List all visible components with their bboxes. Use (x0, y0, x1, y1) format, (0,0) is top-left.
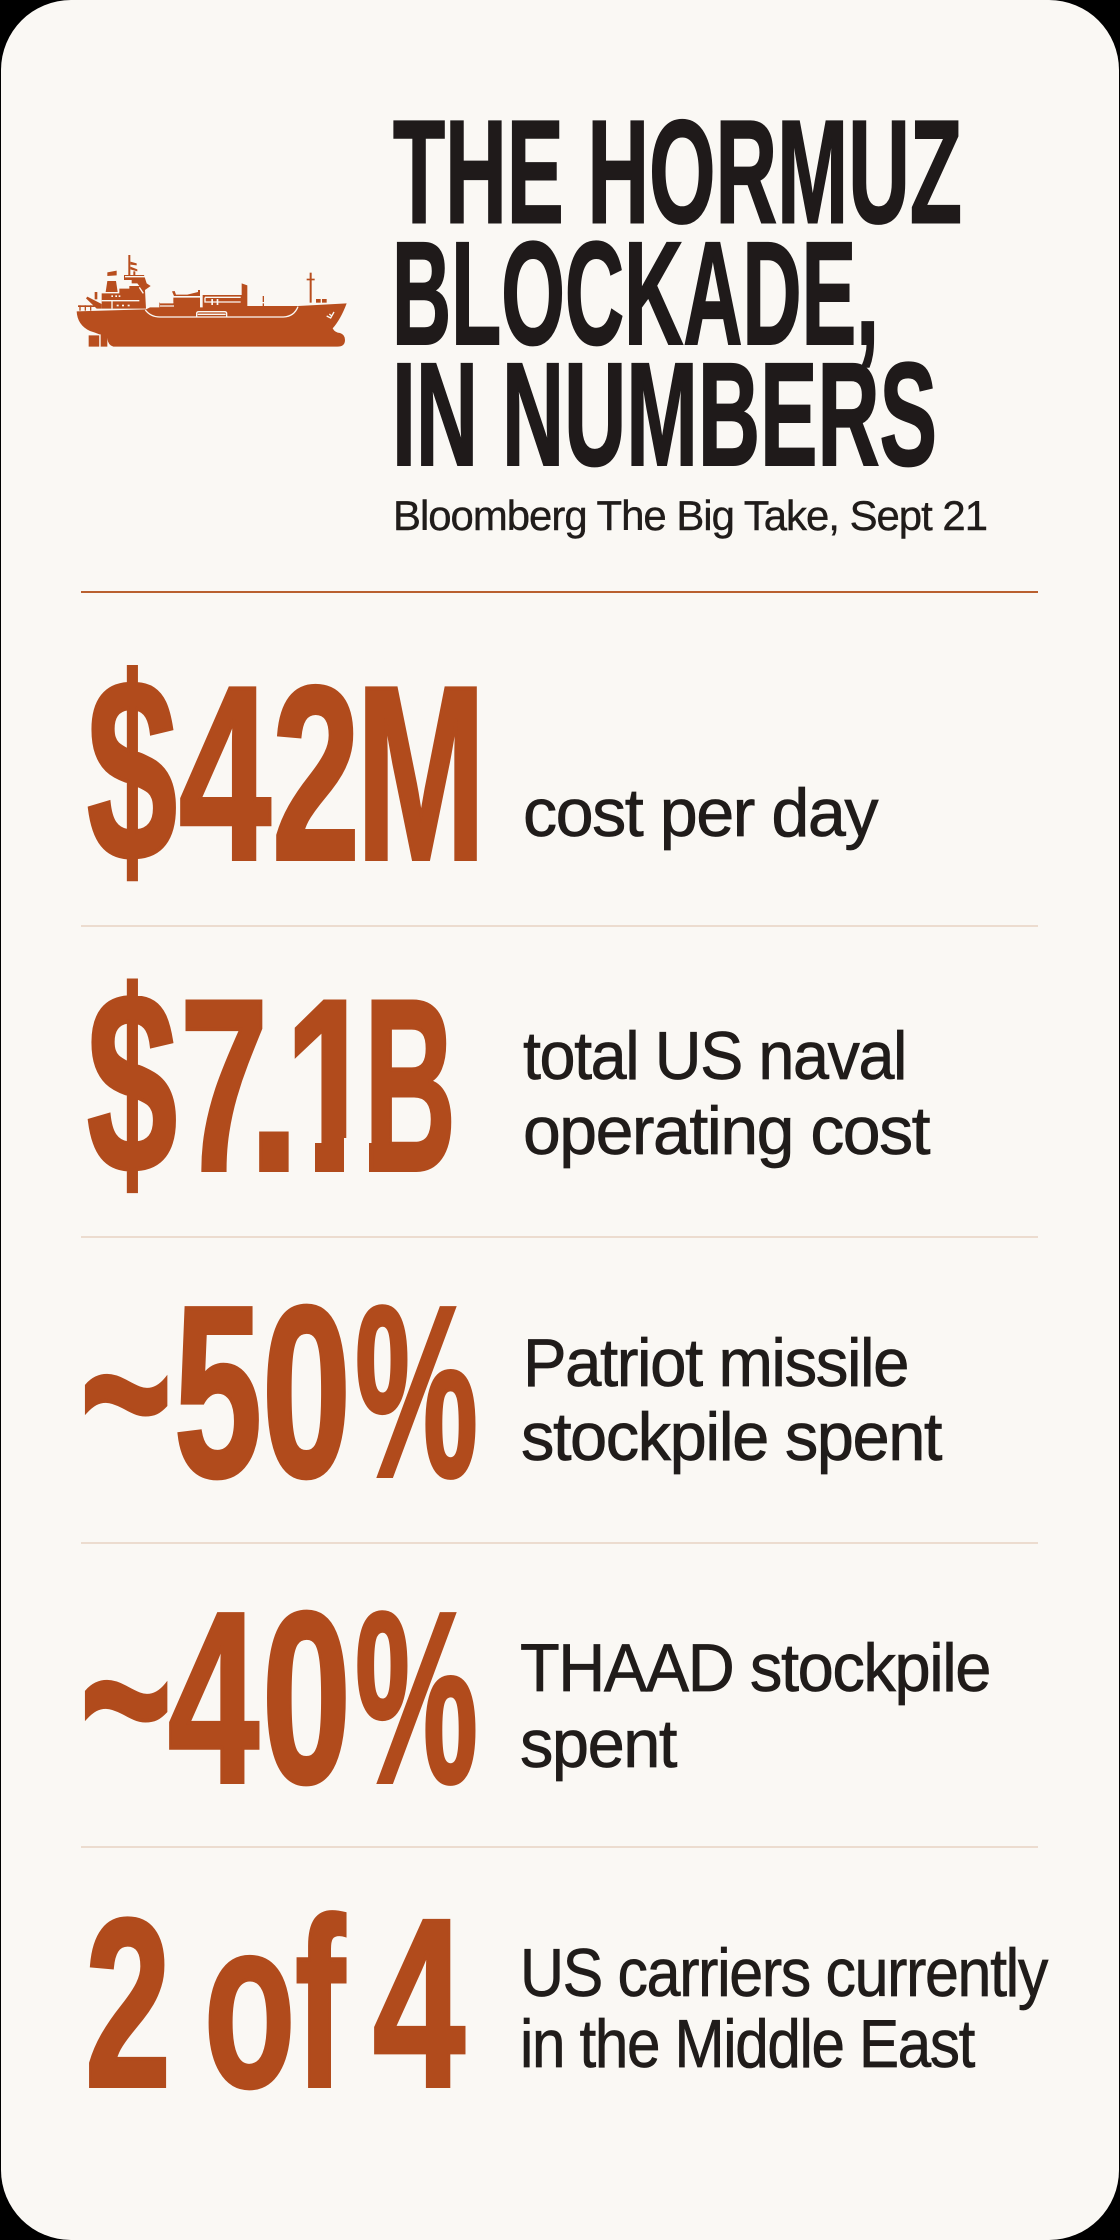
stat value: B (364, 948, 456, 1222)
stat value: 1 (285, 948, 375, 1222)
stat label: cost per day (523, 775, 878, 851)
stat value: 7 (180, 948, 268, 1222)
ship windows (111, 295, 218, 306)
stat label: spent (520, 1706, 678, 1782)
stat label (523, 1018, 931, 1169)
stat value: ~ (80, 1561, 172, 1834)
header rule (81, 591, 1038, 593)
ship cutouts and highlights (100, 277, 334, 347)
subtitle: Bloomberg The Big Take, Sept 21 (393, 492, 987, 539)
stat row: cost per day (87, 626, 878, 916)
stat label (520, 1935, 1048, 2082)
stat value: . (248, 948, 300, 1222)
stat label: in the Middle East (520, 2006, 975, 2082)
stat value: $ (87, 626, 177, 916)
stat value: 5 (174, 1255, 262, 1528)
stat value: 4 (179, 634, 271, 912)
stat value: 0 (262, 1255, 351, 1528)
stat label: total US naval (523, 1018, 906, 1094)
stat label: stockpile spent (521, 1399, 943, 1475)
title (392, 90, 962, 497)
stat label (521, 1325, 943, 1475)
stat value: 0 (262, 1561, 351, 1834)
stat value: 4 (373, 1869, 465, 2137)
stat label (520, 1630, 990, 1782)
stat value: 2 (272, 634, 360, 912)
stat value: % (355, 1561, 478, 1834)
stat label: US carriers currently (520, 1935, 1048, 2011)
stat value: M (356, 634, 486, 912)
stat label: THAAD stockpile (520, 1630, 990, 1706)
stat value: 4 (168, 1561, 259, 1834)
icon: oil tanker ship (77, 255, 347, 347)
stat row: THAAD stockpile spent (80, 1561, 990, 1834)
stat value: 2 (85, 1869, 171, 2137)
stat value: $ (87, 938, 177, 1227)
stat row: total US naval operating cost (87, 938, 931, 1227)
stat value: of (204, 1869, 346, 2137)
stat label: Patriot missile (523, 1325, 908, 1401)
stat row: US carriers in the Middle East (85, 1869, 1048, 2137)
stat value: ~ (80, 1255, 172, 1528)
stat label: operating cost (523, 1093, 931, 1169)
stat row: Patriot missile stockpile spent (80, 1255, 943, 1528)
stat value: % (355, 1255, 478, 1528)
